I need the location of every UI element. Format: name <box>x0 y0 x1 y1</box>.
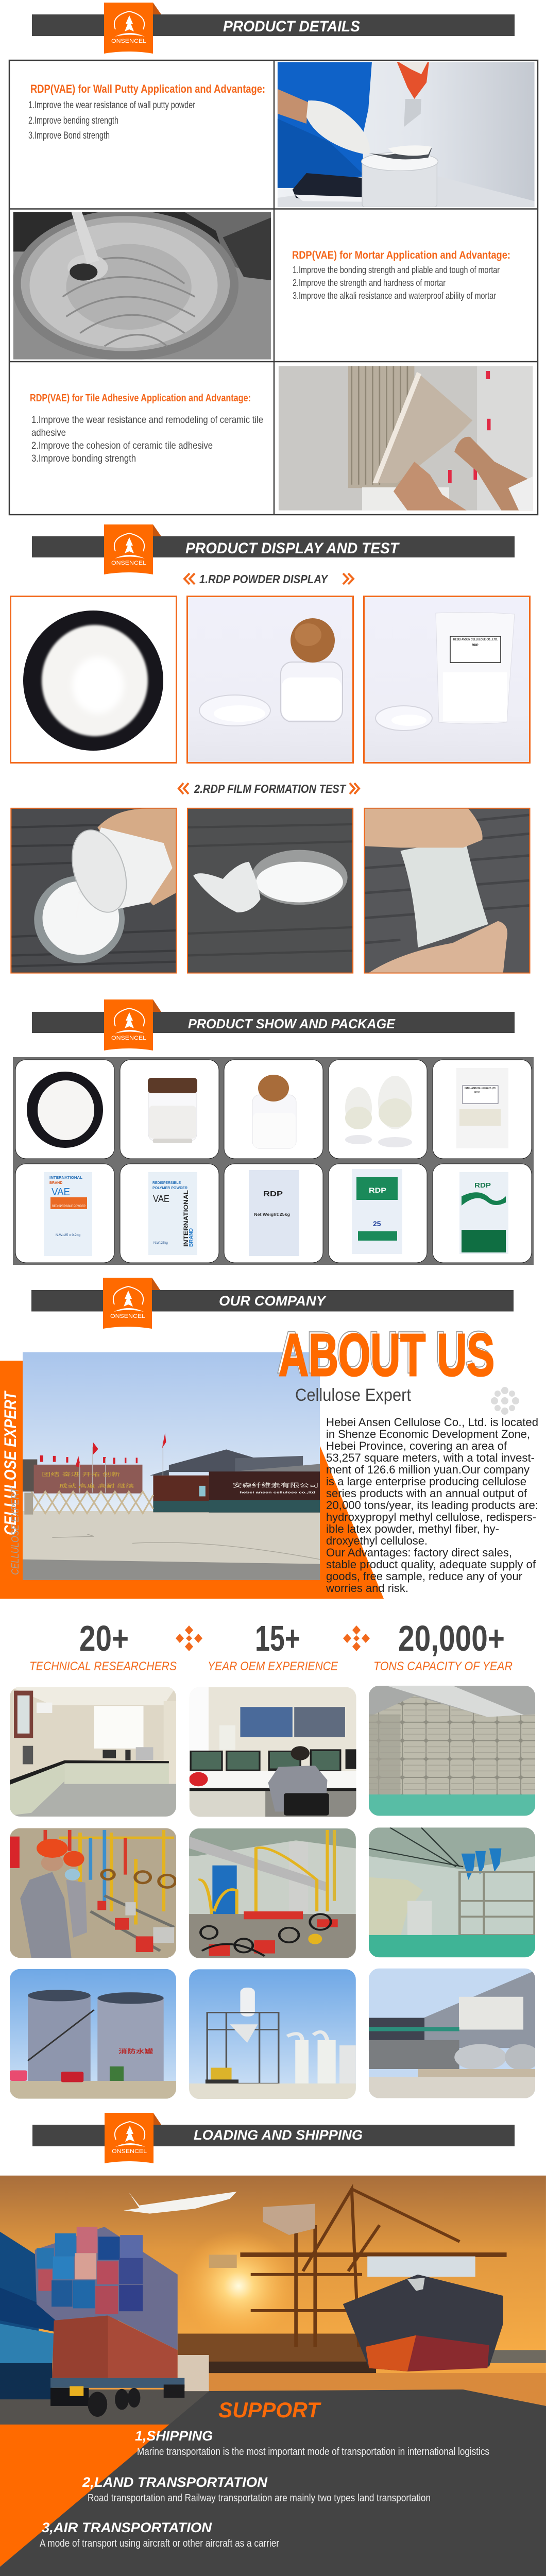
photo: spray towers <box>189 1969 356 2099</box>
text block: tile adhesive: 1.Improve the wear resistance and remodeling of ceramic tile <box>31 415 263 426</box>
stat: 15+ year OEM experience: 15+ <box>255 1618 300 1658</box>
text block: company profile: 53,257 square meters, with a total invest- <box>326 1451 535 1464</box>
section header: product details <box>32 3 515 54</box>
section header: product show and package: ONSENCEL <box>111 1035 146 1041</box>
text block: land transportation <box>82 2475 431 2504</box>
photo: factory entrance: 成就 高度 高耐 继续 <box>59 1483 134 1489</box>
section header: product show and package: PRODUCT SHOW AND PACKAGE <box>188 1016 396 1031</box>
photo: warehouse stock <box>369 1686 535 1816</box>
card: RDP bag green band <box>329 1164 427 1263</box>
text block: tile adhesive <box>30 393 263 464</box>
card: VAE bag international brand: BRAND <box>49 1181 62 1185</box>
text block: mortar <box>292 249 510 301</box>
icon: orange diamonds <box>176 1625 202 1651</box>
card: RDP bag green wave: RDP <box>474 1181 491 1189</box>
text block: company profile: stable product quality, adequate supply of <box>326 1558 536 1571</box>
card: pouch bag: RDP <box>474 1091 480 1094</box>
section header: loading and shipping <box>32 2113 515 2163</box>
section header: product details: ONSENCEL <box>111 38 146 44</box>
text block: tile adhesive: 2.Improve the cohesion of ceramic tile adhesive <box>31 440 213 451</box>
stat: 15+ year OEM experience: YEAR OEM EXPERIENCE <box>208 1659 338 1673</box>
photo: factory entrance: hebei ansen cellulose co.,ltd <box>240 1490 315 1494</box>
text block: air transportation: 3,AIR TRANSPORTATION <box>42 2520 212 2535</box>
text block: company profile: hydroxypropyl methyl cellulose, redispers- <box>326 1511 536 1523</box>
section header: product display and test <box>32 524 515 574</box>
text block: company profile: worries and risk. <box>326 1582 408 1595</box>
text block: company profile: 20,000 tons/year, its leading products are: <box>326 1499 538 1512</box>
card: VAE bag international brand: REDISPERSIBLE POWDER <box>52 1205 86 1208</box>
text block: tile adhesive: 3.Improve bonding strength <box>31 453 136 464</box>
photo: sample bag with label: HEBEI ANSEN CELLULOSE CO., LTD. <box>453 638 498 641</box>
photo: factory entrance: 团结 奋进 开拓 创新 <box>42 1471 121 1477</box>
photo: workers at valves <box>10 1828 176 1958</box>
section header: our company: ONSENCEL <box>110 1313 145 1319</box>
photo: production hall <box>369 1827 535 1957</box>
text block: wall putty: 2.Improve bending strength <box>28 115 118 126</box>
stat: 20+ technical researchers: TECHNICAL RESEARCHERS <box>29 1659 177 1673</box>
card: powder plate <box>15 1060 114 1159</box>
text block: land transportation: Road transportation and Railway transportation are mainly two types land transportation <box>88 2493 431 2504</box>
photo: worker applying wall putty <box>278 62 535 207</box>
card: RDP bag net weight <box>224 1164 323 1263</box>
panel: application table <box>9 60 538 515</box>
photo: factory entrance <box>23 1352 320 1580</box>
subheading: RDP powder display: 1.RDP POWDER DISPLAY <box>199 572 329 586</box>
text block: company profile <box>326 1416 538 1595</box>
text block: company profile: ible latex powder, methyl fiber, hy- <box>326 1522 499 1535</box>
photo: process pipes <box>189 1828 356 1958</box>
card: RDP bag green wave <box>433 1164 532 1263</box>
text block: mortar: 2.Improve the strength and hardness of mortar <box>293 278 446 288</box>
card: VAE bag redispersible polymer powder: BRAND <box>189 1228 194 1247</box>
section header: product details: PRODUCT DETAILS <box>223 18 360 35</box>
card: pouch bag <box>433 1060 532 1159</box>
text block: company profile: ment of 126.6 million yuan.Our company <box>326 1463 530 1476</box>
text block: company profile: Hebei Province, covering an area of <box>326 1439 507 1452</box>
photo: laboratory <box>10 1687 176 1817</box>
text block: land transportation: 2,LAND TRANSPORTATION <box>82 2475 267 2490</box>
text block: wall putty: 1.Improve the wear resistance of wall putty powder <box>28 100 195 111</box>
section header: our company: OUR COMPANY <box>219 1293 327 1309</box>
photo: cooling towers and tanks <box>369 1969 540 2098</box>
card: VAE bag redispersible polymer powder: POLYMER POWDER <box>152 1187 187 1190</box>
text block: company profile: droxyethyl cellulose. <box>326 1534 428 1547</box>
text block: company profile: goods, free sample, reduce any of your <box>326 1570 522 1583</box>
heading: support: SUPPORT <box>218 2398 321 2422</box>
section header: product display and test: PRODUCT DISPLAY AND TEST <box>185 540 400 557</box>
card: glass flasks <box>329 1060 427 1159</box>
card: RDP bag green band: 25 <box>373 1219 381 1228</box>
section header: product show and package <box>32 999 515 1050</box>
stat: 15+ year OEM experience <box>208 1618 338 1673</box>
photo: jar with cork ball <box>187 597 353 762</box>
photo: mixing mortar <box>12 210 271 361</box>
section header: our company <box>31 1278 514 1329</box>
card: VAE bag international brand: INTERNATIONAL <box>49 1176 83 1180</box>
photo: sample bag with label <box>364 597 530 762</box>
stat: 20+ technical researchers: 20+ <box>79 1618 129 1658</box>
icon: grey flower <box>491 1387 519 1415</box>
photo: laying ceramic tile <box>279 366 533 511</box>
vertical label: cellulose expert <box>1 1391 21 1575</box>
subheading: RDP film formation test: 2.RDP FILM FORMATION TEST <box>194 782 347 795</box>
vertical label: cellulose expert: CELLULOSE EXPERT <box>1 1391 20 1535</box>
text block: tile adhesive: RDP(VAE) for Tile Adhesive Application and Advantage: <box>30 393 251 404</box>
photo: water tanks <box>10 1969 176 2099</box>
card: pouch bag: HEBEI ANSEN CELLULOSE CO.,LTD <box>465 1087 496 1090</box>
text block: company profile: series products with an annual output of <box>326 1487 527 1500</box>
section header: product display and test: ONSENCEL <box>111 560 146 566</box>
text block: air transportation <box>40 2520 279 2549</box>
stat: 20,000+ tons capacity <box>373 1618 513 1673</box>
text block: shipping: 1,SHIPPING <box>135 2428 213 2444</box>
photo: port at sunset <box>0 2176 546 2426</box>
panel: support <box>0 2389 546 2576</box>
text block: mortar: 1.Improve the bonding strength and pliable and tough of mortar <box>293 265 500 275</box>
photo: control room <box>189 1687 356 1817</box>
card: VAE bag redispersible polymer powder: VAE <box>153 1194 169 1204</box>
text block: mortar: 3.Improve the alkali resistance and waterproof ability of mortar <box>293 291 496 301</box>
photo: stretching the film <box>364 808 531 974</box>
photo: pouring emulsion <box>10 808 177 974</box>
text block: tile adhesive: adhesive <box>31 428 66 438</box>
text block: wall putty: 3.Improve Bond strength <box>28 130 110 141</box>
vertical label: cellulose expert: CELLULOSE EXPERT <box>10 1487 21 1575</box>
photo: powder on black plate <box>10 597 176 762</box>
section header: loading and shipping: ONSENCEL <box>112 2148 147 2155</box>
text block: mortar: RDP(VAE) for Mortar Application and Advantage: <box>292 249 510 261</box>
photo: water tanks: 消防水罐 <box>118 2047 153 2055</box>
stat: 20,000+ tons capacity: 20,000+ <box>398 1618 505 1658</box>
card: VAE bag redispersible polymer powder <box>120 1164 219 1263</box>
text block: shipping: Marine transportation is the most important mode of transportation in international logistics <box>137 2446 489 2458</box>
stat: 20,000+ tons capacity: TONS CAPACITY OF YEAR <box>373 1659 513 1673</box>
card: jar with cork ball <box>224 1060 323 1159</box>
card: RDP bag net weight: RDP <box>263 1190 283 1198</box>
panel: product gallery <box>13 1057 534 1265</box>
text block: air transportation: A mode of transport using aircraft or other aircraft as a carrier <box>40 2538 279 2549</box>
card: RDP bag net weight: Net Weight:25kg <box>254 1212 290 1217</box>
photo: sample bag with label: RDP <box>472 644 479 647</box>
card: VAE bag international brand: VAE <box>52 1187 70 1198</box>
text block: company profile: Hebei Ansen Cellulose Co., Ltd. is located <box>326 1416 538 1429</box>
stat: 20+ technical researchers <box>29 1618 177 1673</box>
text block: wall putty <box>28 82 265 141</box>
orange backdrop shape <box>0 1361 384 1599</box>
subtitle: cellulose expert: Cellulose Expert <box>295 1385 412 1405</box>
card: VAE bag international brand <box>15 1164 114 1263</box>
text block: wall putty: RDP(VAE) for Wall Putty Application and Advantage: <box>30 82 265 95</box>
section header: loading and shipping: LOADING AND SHIPPING <box>194 2127 363 2143</box>
text block: company profile: Our Advantages: factory direct sales, <box>326 1546 512 1559</box>
photo: dried film and dish <box>187 808 353 974</box>
card: RDP bag green band: RDP <box>369 1186 386 1194</box>
text block: company profile: is a large enterprise producing cellulose <box>326 1475 526 1488</box>
card: VAE bag redispersible polymer powder: REDISPERSIBLE <box>152 1181 181 1185</box>
card: VAE bag international brand: N.W.:25 x 0.2kg <box>56 1234 80 1237</box>
card: jar with wooden lid <box>120 1060 219 1159</box>
text block: company profile: in Shenze Economic Development Zone, <box>326 1428 530 1440</box>
icon: orange diamonds <box>343 1625 370 1651</box>
photo: factory entrance: 安森纤维素有限公司 <box>233 1482 319 1488</box>
card: VAE bag redispersible polymer powder: INTERNATIONAL <box>182 1190 190 1247</box>
text block: shipping <box>135 2428 489 2458</box>
card: VAE bag redispersible polymer powder: N.W.:25kg <box>153 1242 168 1245</box>
